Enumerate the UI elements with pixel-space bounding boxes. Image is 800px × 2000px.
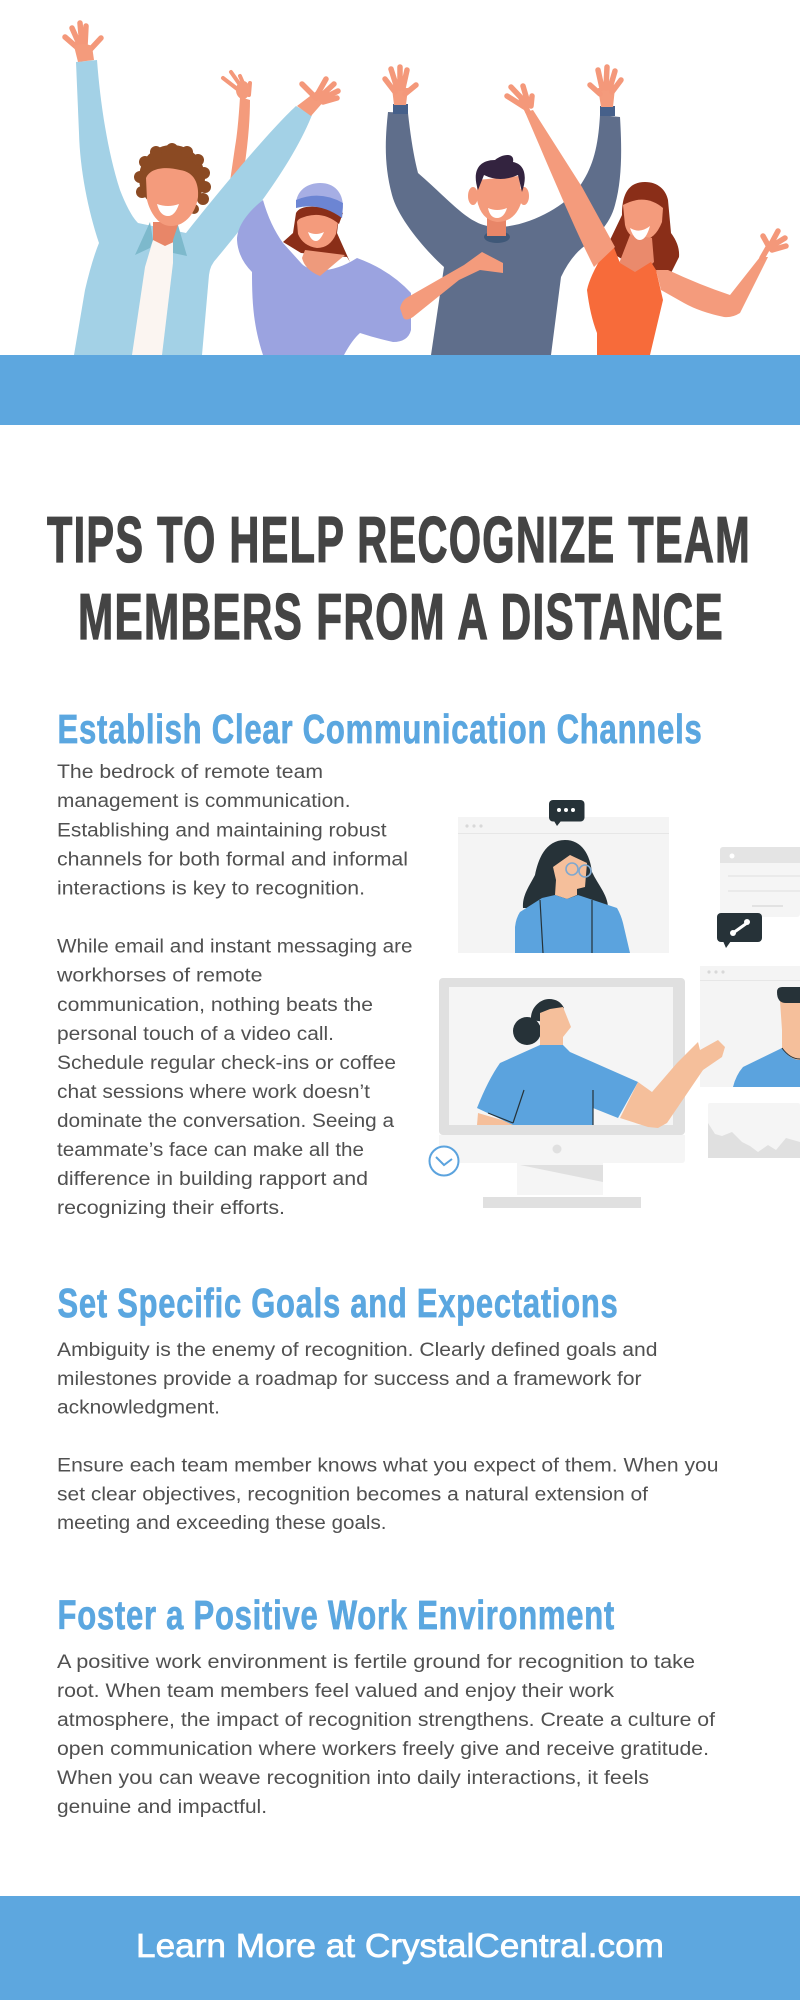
person 2: purple sweater and hat [237, 183, 411, 355]
text block: communication paragraph 1: Establishing and maintaining robust [57, 820, 387, 842]
text block: communication paragraph 1: channels for both formal and informal [57, 848, 408, 870]
text block: goals paragraph 2: set clear objectives, recognition becomes a natural extension of [57, 1484, 649, 1506]
text block: goals paragraph 1: milestones provide a roadmap for success and a framework for [57, 1368, 642, 1390]
text block: environment paragraph: When you can weave recognition into daily interactions, it feels [57, 1767, 649, 1789]
text block: communication paragraph 2: workhorses of remote [56, 964, 263, 986]
text block: environment paragraph [57, 1651, 716, 1818]
icon: phone bubble [717, 913, 762, 948]
hero illustration: cheering team [65, 23, 786, 355]
text block: goals paragraph 2 [57, 1454, 719, 1534]
text block: communication paragraph 2: Schedule regular check-ins or coffee [57, 1052, 396, 1074]
text block: communication paragraph 2: chat sessions where work doesn’t [57, 1081, 371, 1103]
blue band under hero [0, 355, 800, 425]
text block: environment paragraph: genuine and impactful. [57, 1796, 267, 1818]
text block: communication paragraph 2: difference in building rapport and [57, 1168, 368, 1190]
text block: communication paragraph 1: interactions is key to recognition. [57, 878, 365, 900]
text block: communication paragraph 2: communication, nothing beats the [57, 994, 373, 1016]
person 1: light blue shirt [74, 60, 312, 355]
text block: goals paragraph 2: meeting and exceeding these goals. [57, 1512, 386, 1534]
icon: chat bubble [549, 800, 584, 826]
text block: goals paragraph 1 [57, 1339, 658, 1418]
text block: communication paragraph 2: teammate’s face can make all the [57, 1139, 364, 1161]
text block: communication paragraph 1: The bedrock of remote team [57, 761, 323, 783]
icon: clock badge [430, 1146, 458, 1176]
window: form panel [720, 847, 800, 917]
title [47, 503, 751, 653]
text block: communication paragraph 2: dominate the conversation. Seeing a [57, 1110, 394, 1132]
monitor with presenting woman [439, 978, 725, 1208]
text block: communication paragraph 2 [56, 936, 413, 1219]
window: woman with glasses [458, 817, 669, 953]
text block: goals paragraph 1: Ambiguity is the enemy of recognition. Clearly defined goals and [57, 1339, 658, 1361]
person 3 hands [385, 67, 621, 107]
footer band with call to action [0, 1896, 800, 2000]
window: man on call [700, 966, 800, 1087]
heading: set specific goals and expectations: Set Specific Goals and Expectations [58, 1280, 618, 1326]
text block: environment paragraph: A positive work environment is fertile ground for recognition to take [57, 1651, 695, 1673]
person 2 raised arm [223, 72, 250, 195]
text block: communication paragraph 2: recognizing their efforts. [57, 1197, 285, 1219]
heading: foster a positive work environment: Foster a Positive Work Environment [58, 1592, 615, 1638]
person 4: orange top [507, 86, 786, 355]
person 3: dark sweater [386, 104, 621, 355]
text block: environment paragraph: open communication where workers freely give and receive gratitude. [57, 1738, 709, 1760]
text block: goals paragraph 2: Ensure each team member knows what you expect of them. When you [57, 1454, 719, 1476]
person 2 arm across chest [400, 252, 503, 320]
person 1 hands [65, 23, 338, 116]
text block: environment paragraph: root. When team members feel valued and enjoy their work [57, 1680, 614, 1702]
text block: environment paragraph: atmosphere, the impact of recognition strengthens. Create a culture of [57, 1709, 716, 1731]
text block: communication paragraph 2: While email and instant messaging are [57, 936, 413, 958]
text block: communication paragraph 2: personal touch of a video call. [57, 1023, 334, 1045]
text block: goals paragraph 1: acknowledgment. [57, 1396, 220, 1418]
footer band with call to action: Learn More at CrystalCentral.com [136, 1927, 664, 1964]
video call illustration [430, 800, 800, 1208]
text block: communication paragraph 1 [57, 761, 408, 900]
area chart panel [708, 1103, 800, 1158]
text block: communication paragraph 1: management is communication. [57, 790, 350, 812]
